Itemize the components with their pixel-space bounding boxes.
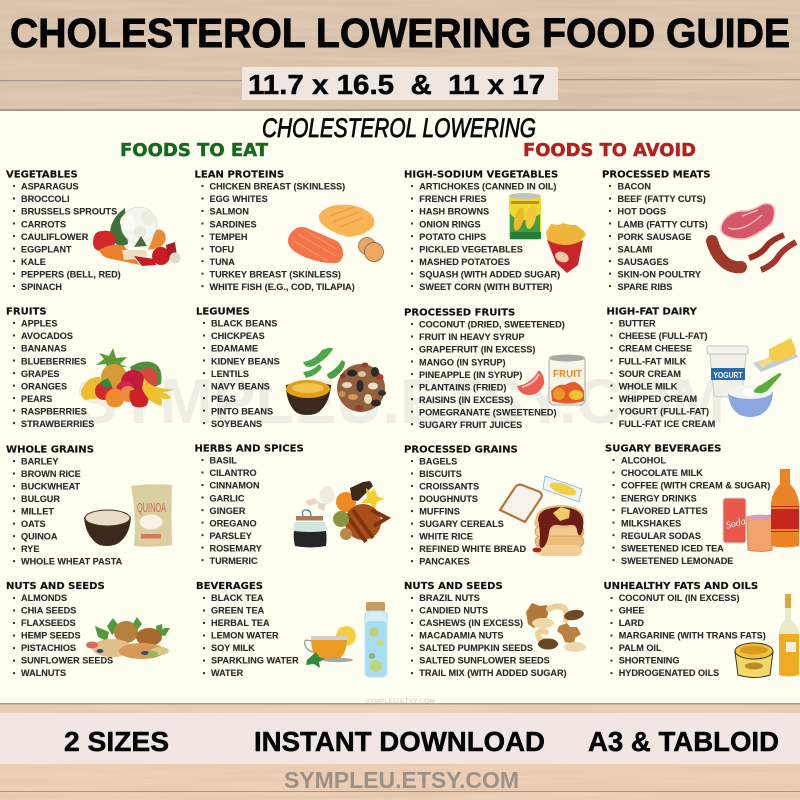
list: processed fruits: FRUIT IN HEAVY SYRUP <box>419 332 524 342</box>
list: nuts and seeds (eat) <box>6 581 113 678</box>
icon: sugary beverages: Soda <box>725 516 747 532</box>
list: nuts and seeds (eat): ALMONDS <box>21 593 67 603</box>
heading: foods to avoid: FOODS TO AVOID <box>523 141 696 161</box>
list: sugary beverages: MILKSHAKES <box>621 518 681 528</box>
list: unhealthy fats and oils: MARGARINE (WITH TRANS FATS) <box>619 631 766 641</box>
list: legumes: PINTO BEANS <box>211 406 273 416</box>
list: high-sodium vegetables: FRENCH FRIES <box>419 194 487 204</box>
list: vegetables: CAULIFLOWER <box>21 232 89 242</box>
list: nuts and seeds (avoid): CASHEWS (IN EXCESS) <box>419 618 523 628</box>
icon: sugary beverages <box>723 469 799 552</box>
list: fruits: ORANGES <box>21 381 67 391</box>
list: processed meats <box>602 170 711 292</box>
list: unhealthy fats and oils: GHEE <box>619 606 645 616</box>
list: unhealthy fats and oils: LARD <box>619 618 644 628</box>
wood background: top <box>0 0 800 111</box>
list: processed grains <box>404 444 527 567</box>
poster heading: CHOLESTEROL LOWERING <box>262 113 536 143</box>
list: high-sodium vegetables: HASH BROWNS <box>419 207 489 217</box>
size badge: 11.7 x 16.5 & 11 x 17 <box>248 69 545 100</box>
list: whole grains: BUCKWHEAT <box>21 481 80 491</box>
list: legumes: KIDNEY BEANS <box>211 356 280 366</box>
list: processed fruits: PROCESSED FRUITS <box>404 308 515 318</box>
list: nuts and seeds (eat): HEMP SEEDS <box>21 631 81 641</box>
list: beverages: BEVERAGES <box>196 581 263 592</box>
list: processed fruits: MANGO (IN SYRUP) <box>419 357 506 367</box>
list: nuts and seeds (avoid): SALTED PUMPKIN SEEDS <box>419 643 533 653</box>
list: lean proteins: SARDINES <box>210 219 257 229</box>
icon: processed grains <box>500 476 584 556</box>
list: whole grains: RYE <box>21 544 39 554</box>
list: high-fat dairy: SOUR CREAM <box>619 369 681 379</box>
list: nuts and seeds (avoid): MACADAMIA NUTS <box>419 631 503 641</box>
icon: vegetables <box>93 207 180 266</box>
list: nuts and seeds (eat): PISTACHIOS <box>21 643 76 653</box>
list: processed meats: BACON <box>618 182 651 192</box>
list: processed fruits: COCONUT (DRIED, SWEETENED) <box>419 320 565 330</box>
list: high-fat dairy: FULL-FAT MILK <box>619 356 687 366</box>
list: processed grains: CROISSANTS <box>419 481 479 491</box>
list: fruits: BANANAS <box>21 344 67 354</box>
list: legumes <box>196 306 280 429</box>
list: whole grains: BARLEY <box>21 456 58 466</box>
icon: processed meats <box>712 204 796 270</box>
list: nuts and seeds (avoid): TRAIL MIX (WITH ADDED SUGAR) <box>419 668 567 678</box>
icon: herbs and spices <box>294 481 387 548</box>
list: fruits: FRUITS <box>6 306 47 318</box>
list: processed fruits <box>404 308 565 430</box>
list: sugary beverages: CHOCOLATE MILK <box>621 468 703 478</box>
list: nuts and seeds (avoid): SALTED SUNFLOWER SEEDS <box>419 656 550 666</box>
list: legumes: SOYBEANS <box>211 419 262 429</box>
list: high-fat dairy <box>606 306 715 429</box>
list: legumes: BLACK BEANS <box>211 319 277 329</box>
list: fruits: RASPBERRIES <box>21 406 87 416</box>
list: whole grains: WHOLE WHEAT PASTA <box>21 557 123 567</box>
list: processed fruits: GRAPEFRUIT (IN EXCESS) <box>419 345 535 355</box>
list: lean proteins: EGG WHITES <box>210 194 268 204</box>
list: high-fat dairy: FULL-FAT ICE CREAM <box>619 419 715 429</box>
list: herbs and spices: CILANTRO <box>210 468 257 478</box>
list: sugary beverages: SWEETENED ICED TEA <box>621 543 724 553</box>
list: processed grains: PROCESSED GRAINS <box>404 444 518 456</box>
list: beverages: SPARKLING WATER <box>211 656 299 666</box>
list: high-fat dairy: CHEESE (FULL-FAT) <box>619 331 708 341</box>
shop url: SYMPLEU.ETSY.COM <box>284 767 519 793</box>
heading: foods to eat: FOODS TO EAT <box>120 141 268 161</box>
list: high-sodium vegetables: SWEET CORN (WITH BUTTER) <box>419 282 552 292</box>
wood background: bottom <box>0 703 800 800</box>
list: vegetables: KALE <box>21 257 46 267</box>
list: beverages <box>196 581 299 678</box>
icon: fruits <box>81 348 174 408</box>
list: processed grains: BISCUITS <box>419 469 462 479</box>
list: unhealthy fats and oils: COCONUT OIL (IN EXCESS) <box>619 593 739 603</box>
list: high-fat dairy: HIGH-FAT DAIRY <box>606 306 698 318</box>
list: vegetables: ASPARAGUS <box>21 182 79 192</box>
list: whole grains: WHOLE GRAINS <box>6 444 94 456</box>
list: high-sodium vegetables <box>404 170 560 292</box>
list: legumes: LENTILS <box>211 369 249 379</box>
list: processed meats: SKIN-ON POULTRY <box>618 269 701 279</box>
list: whole grains: BROWN RICE <box>21 469 81 479</box>
list: vegetables: BRUSSELS SPROUTS <box>21 207 117 217</box>
list: processed grains: PANCAKES <box>419 557 470 567</box>
list: vegetables: CARROTS <box>21 219 66 229</box>
list: unhealthy fats and oils: HYDROGENATED OILS <box>619 668 719 678</box>
list: herbs and spices: GINGER <box>210 506 246 516</box>
list: processed grains: BAGELS <box>419 456 457 466</box>
list: herbs and spices <box>194 444 304 566</box>
list: beverages: WATER <box>211 668 244 678</box>
list: sugary beverages: ALCOHOL <box>621 456 666 466</box>
list: legumes: PEAS <box>211 394 236 404</box>
icon: high-fat dairy <box>707 338 798 417</box>
list: nuts and seeds (avoid): CANDIED NUTS <box>419 606 488 616</box>
list: sugary beverages: ENERGY DRINKS <box>621 493 697 503</box>
list: high-fat dairy: WHOLE MILK <box>619 381 678 391</box>
list: nuts and seeds (eat): CHIA SEEDS <box>21 606 76 616</box>
list: processed meats: SPARE RIBS <box>618 282 673 292</box>
list: processed meats: SALAMI <box>618 244 652 254</box>
list: high-sodium vegetables: POTATO CHIPS <box>419 232 486 242</box>
list: lean proteins: TURKEY BREAST (SKINLESS) <box>210 269 341 279</box>
list: whole grains: OATS <box>21 519 46 529</box>
list: nuts and seeds (avoid) <box>404 581 567 678</box>
list: high-sodium vegetables: HIGH-SODIUM VEGETABLES <box>404 170 558 180</box>
list: legumes: NAVY BEANS <box>211 381 270 391</box>
list: nuts and seeds (avoid): BRAZIL NUTS <box>419 593 480 603</box>
list: herbs and spices: OREGANO <box>210 518 257 528</box>
list: fruits: APPLES <box>21 319 57 329</box>
list: legumes: LEGUMES <box>196 306 250 318</box>
list: herbs and spices: TURMERIC <box>210 556 258 566</box>
list: whole grains: MILLET <box>21 506 54 516</box>
list: lean proteins: SALMON <box>210 207 249 217</box>
list: high-fat dairy: BUTTER <box>619 319 656 329</box>
icon: nuts (avoid) <box>526 603 586 652</box>
list: lean proteins: CHICKEN BREAST (SKINLESS) <box>210 182 345 192</box>
list: whole grains: BULGUR <box>21 494 60 504</box>
list: high-sodium vegetables: ARTICHOKES (CANNED IN OIL) <box>419 182 556 192</box>
list: lean proteins: TEMPEH <box>210 232 247 242</box>
list: nuts and seeds (eat): WALNUTS <box>21 668 66 678</box>
watermark: SYMPLEU.ETSY.COM <box>75 367 725 437</box>
list: beverages: HERBAL TEA <box>211 618 270 628</box>
icon: nuts and seeds <box>86 617 170 659</box>
icon: high-sodium vegetables <box>509 193 586 273</box>
list: vegetables <box>6 170 121 292</box>
list: vegetables: PEPPERS (BELL, RED) <box>21 269 121 279</box>
icon: whole grains: QUINOA <box>137 500 166 515</box>
list: herbs and spices: BASIL <box>210 456 237 466</box>
list: unhealthy fats and oils: PALM OIL <box>619 643 662 653</box>
list: processed meats: PROCESSED MEATS <box>602 170 711 180</box>
list: unhealthy fats and oils: UNHEALTHY FATS AND OILS <box>604 581 758 592</box>
list: processed fruits: RAISINS (IN EXCESS) <box>419 395 513 405</box>
list: processed fruits: POMEGRANATE (SWEETENED) <box>419 407 556 417</box>
list: high-fat dairy: WHIPPED CREAM <box>619 394 697 404</box>
list: vegetables: SPINACH <box>21 282 62 292</box>
list: whole grains <box>6 444 123 567</box>
bottom banner: A3 & TABLOID <box>588 726 779 757</box>
list: herbs and spices: PARSLEY <box>210 531 252 541</box>
list: legumes: CHICKPEAS <box>211 331 265 341</box>
list: nuts and seeds (eat): NUTS AND SEEDS <box>6 581 105 592</box>
list: processed meats: SAUSAGES <box>618 257 669 267</box>
list: processed meats: PORK SAUSAGE <box>618 232 691 242</box>
icon: lean proteins <box>288 205 384 263</box>
list: lean proteins: LEAN PROTEINS <box>194 170 284 180</box>
list: vegetables: EGGPLANT <box>21 244 72 254</box>
icon: whole grains <box>84 484 172 547</box>
list: processed grains: REFINED WHITE BREAD <box>419 544 527 554</box>
list: whole grains: QUINOA <box>21 532 58 542</box>
list: high-sodium vegetables: PICKLED VEGETABLES <box>419 244 523 254</box>
list: unhealthy fats and oils <box>604 581 766 678</box>
list: lean proteins <box>194 170 355 292</box>
list: processed fruits: SUGARY FRUIT JUICES <box>419 420 522 430</box>
list: herbs and spices: CINNAMON <box>210 481 260 491</box>
list: sugary beverages: SUGARY BEVERAGES <box>605 444 721 454</box>
list: lean proteins: TUNA <box>210 257 235 267</box>
list: processed fruits: PINEAPPLE (IN SYRUP) <box>419 370 522 380</box>
list: high-sodium vegetables: MASHED POTATOES <box>419 257 510 267</box>
list: fruits: PEARS <box>21 394 52 404</box>
list: processed grains: DOUGHNUTS <box>419 494 478 504</box>
icon: high-fat dairy: YOGURT <box>714 371 743 380</box>
tiny watermark: SYMPLEU.ETSY.COM <box>365 698 435 705</box>
bottom banner: INSTANT DOWNLOAD <box>254 726 545 757</box>
list: sugary beverages: SWEETENED LEMONADE <box>621 556 733 566</box>
list: fruits: BLUEBERRIES <box>21 356 86 366</box>
icon: processed fruits <box>517 354 585 405</box>
list: sugary beverages: FLAVORED LATTES <box>621 506 708 516</box>
list: fruits <box>6 306 94 429</box>
list: processed meats: HOT DOGS <box>618 207 666 217</box>
list: beverages: SOY MILK <box>211 643 255 653</box>
list: unhealthy fats and oils: SHORTENING <box>619 656 679 666</box>
list: processed grains: SUGARY CEREALS <box>419 519 504 529</box>
list: processed grains: MUFFINS <box>419 506 460 516</box>
list: high-sodium vegetables: SQUASH (WITH ADDED SUGAR) <box>419 269 560 279</box>
icon: legumes <box>286 348 386 415</box>
list: beverages: BLACK TEA <box>211 593 264 603</box>
list: legumes: EDAMAME <box>211 344 258 354</box>
icon: unhealthy fats and oils <box>735 594 799 678</box>
list: herbs and spices: HERBS AND SPICES <box>194 444 304 454</box>
list: sugary beverages: COFFEE (WITH CREAM & SUGAR) <box>621 481 770 491</box>
list: processed grains: WHITE RICE <box>419 532 473 542</box>
list: herbs and spices: ROSEMARY <box>210 543 262 553</box>
list: beverages: LEMON WATER <box>211 631 279 641</box>
list: high-fat dairy: CREAM CHEESE <box>619 344 692 354</box>
list: processed meats: LAMB (FATTY CUTS) <box>618 219 708 229</box>
list: herbs and spices: GARLIC <box>210 493 245 503</box>
list: fruits: GRAPES <box>21 369 59 379</box>
list: nuts and seeds (eat): FLAXSEEDS <box>21 618 76 628</box>
list: sugary beverages <box>605 444 770 566</box>
bottom banner: 2 SIZES <box>64 726 169 757</box>
list: lean proteins: TOFU <box>210 244 235 254</box>
list: lean proteins: WHITE FISH (E.G., COD, TILAPIA) <box>210 282 355 292</box>
list: processed fruits: PLANTAINS (FRIED) <box>419 382 506 392</box>
list: high-sodium vegetables: ONION RINGS <box>419 219 481 229</box>
list: nuts and seeds (avoid): NUTS AND SEEDS <box>404 581 503 592</box>
list: nuts and seeds (eat): SUNFLOWER SEEDS <box>21 656 113 666</box>
bottom banner <box>0 713 800 764</box>
list: beverages: GREEN TEA <box>211 606 265 616</box>
list: sugary beverages: REGULAR SODAS <box>621 531 701 541</box>
poster panel <box>0 111 800 704</box>
icon: beverages <box>305 602 387 677</box>
list: vegetables: VEGETABLES <box>6 170 78 180</box>
icon: processed fruits: FRUIT <box>553 369 582 380</box>
list: processed meats: BEEF (FATTY CUTS) <box>618 194 706 204</box>
list: fruits: AVOCADOS <box>21 331 73 341</box>
list: high-fat dairy: YOGURT (FULL-FAT) <box>619 406 709 416</box>
list: vegetables: BROCCOLI <box>21 194 70 204</box>
list: fruits: STRAWBERRIES <box>21 419 94 429</box>
